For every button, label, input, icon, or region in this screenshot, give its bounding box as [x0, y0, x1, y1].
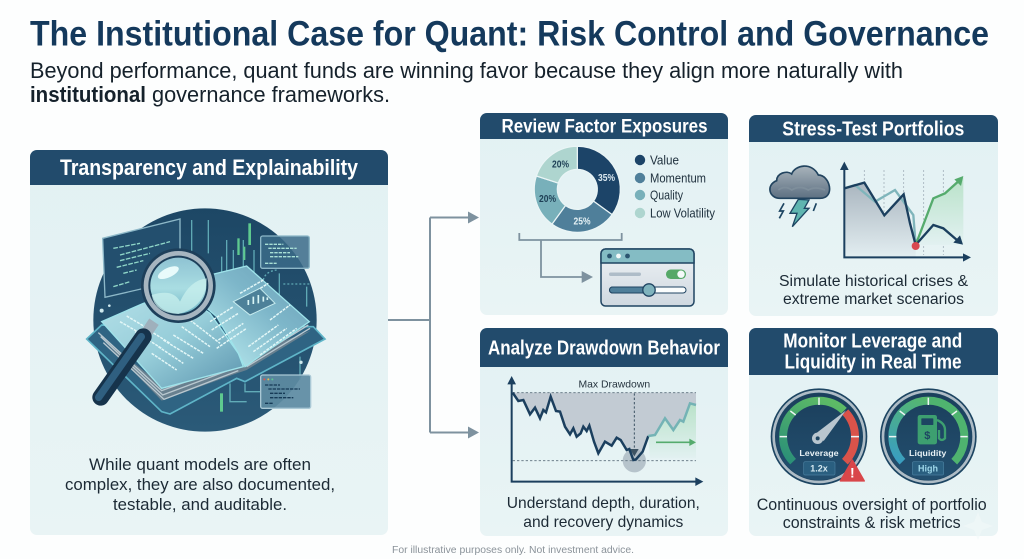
gauge: liquidity [880, 388, 977, 485]
description: transparency [65, 455, 335, 514]
gauge: leverage: 1.2x [810, 463, 828, 473]
panel header: monitor: Monitor Leverage and [783, 331, 962, 353]
subtitle: institutional [30, 82, 146, 107]
data window top-right [261, 236, 309, 268]
description: monitor [757, 496, 987, 532]
magnifying glass [99, 248, 216, 397]
description: drawdown: Understand depth, duration, [507, 495, 700, 512]
description: transparency: complex, they are also documented, [65, 475, 335, 494]
panel: stress-test portfolios [749, 115, 998, 316]
settings window icon [601, 249, 694, 306]
panel: monitor leverage and liquidity [749, 328, 998, 536]
description: drawdown: and recovery dynamics [523, 514, 683, 531]
description: stress-test [779, 273, 969, 308]
panel header: analyze drawdown [480, 328, 728, 367]
drawdown chart: Max Drawdown [578, 379, 650, 390]
flow connector arrows [388, 212, 479, 438]
description: stress-test: Simulate historical crises & [779, 273, 969, 290]
icon: warning triangle: ! [850, 465, 855, 481]
legend: Quality [650, 188, 684, 202]
panel header: analyze drawdown: Analyze Drawdown Behavior [488, 337, 720, 359]
panel header: stress-test: Stress-Test Portfolios [782, 118, 964, 140]
bracket arrow [519, 233, 622, 283]
icon: storm cloud with lightning [770, 166, 830, 227]
stress line chart [840, 162, 971, 262]
subtitle: Beyond performance, quant funds are winning favor because they align more naturally with [30, 58, 903, 83]
donut chart: 25% [574, 216, 591, 228]
panel: review factor exposures [480, 113, 728, 315]
legend: Value [650, 153, 679, 167]
icon: fuel pump: $ [924, 430, 930, 442]
panel: analyze drawdown behavior [480, 328, 728, 536]
watermark sparkle [963, 512, 993, 540]
description: transparency: While quant models are often [89, 455, 311, 474]
gauge: leverage: Leverage [799, 448, 839, 458]
subtitle [30, 58, 903, 107]
description: monitor: Continuous oversight of portfolio [757, 496, 987, 514]
donut chart [534, 146, 620, 232]
subtitle: governance frameworks. [152, 82, 390, 107]
panel header: monitor [749, 328, 998, 375]
book [87, 266, 325, 414]
gauge: liquidity: High [918, 463, 938, 473]
illustration: open book with magnifying glass [87, 208, 325, 432]
panel header: transparency: Transparency and Explainability [60, 155, 359, 180]
footer disclaimer: For illustrative purposes only. Not investment advice. [392, 545, 634, 556]
panel header: monitor: Liquidity in Real Time [784, 351, 962, 373]
donut chart: 20% [552, 160, 569, 170]
code window bottom-right [261, 375, 311, 408]
description: drawdown [507, 495, 700, 531]
legend: Low Volatility [650, 206, 716, 220]
panel: transparency and explainability [30, 150, 388, 535]
panel header: transparency [30, 150, 388, 185]
description: transparency: testable, and auditable. [113, 495, 287, 514]
drawdown chart [507, 376, 703, 486]
legend: Momentum [650, 171, 706, 185]
legend [635, 153, 716, 220]
code window top-left [103, 219, 180, 297]
gauge: leverage [771, 388, 867, 485]
panel header: review factor exposures: Review Factor Exposures [502, 116, 708, 138]
panel header: stress-test [749, 115, 998, 142]
description: stress-test: extreme market scenarios [783, 291, 964, 308]
donut chart: 35% [598, 173, 615, 184]
gauge: liquidity: Liquidity [909, 448, 947, 458]
donut chart: 20% [539, 194, 556, 205]
description: monitor: constraints & risk metrics [783, 514, 961, 532]
